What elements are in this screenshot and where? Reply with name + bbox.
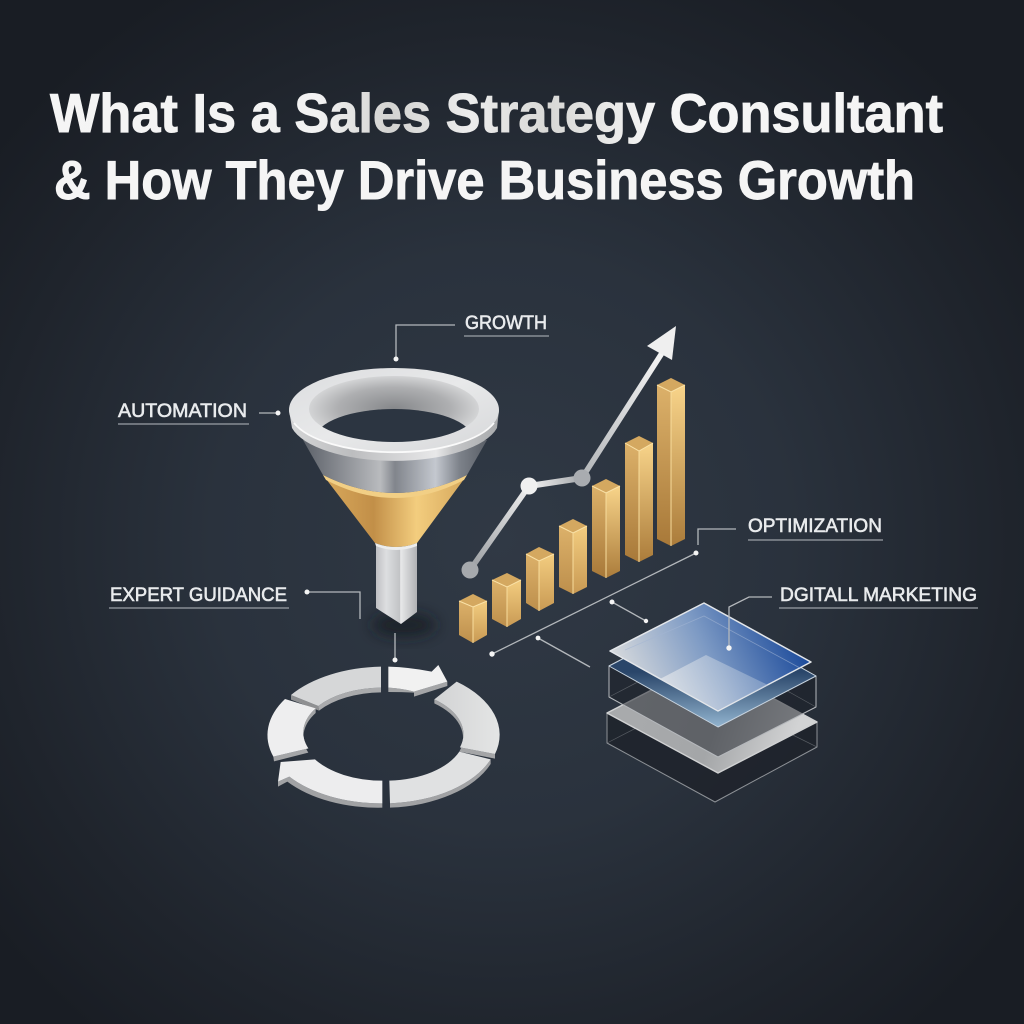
- bar 4: [559, 519, 587, 594]
- cycle ring: [267, 665, 500, 808]
- blue plane: [609, 615, 816, 727]
- upper box: [609, 615, 816, 757]
- label: automation: AUTOMATION: [118, 400, 247, 422]
- ring arrow top right: [388, 665, 447, 697]
- bar 6: [625, 436, 653, 562]
- funnel cavity: [309, 376, 479, 442]
- title: & How They Drive Business Growth: [54, 149, 915, 211]
- funnel rim side: [289, 410, 499, 461]
- funnel opening: [322, 409, 466, 442]
- funnel rim highlight: [294, 423, 494, 452]
- funnel spout collar: [375, 543, 417, 550]
- upper box back edges: [609, 646, 816, 707]
- bar 3: [526, 547, 554, 611]
- funnel: [289, 368, 499, 637]
- bar 1: [459, 594, 487, 643]
- top plane: [610, 603, 811, 711]
- layer callout: [726, 597, 772, 651]
- ring arrow bottom left: [278, 759, 382, 808]
- top plane inner diamond: [660, 655, 768, 710]
- top plane inner line: [625, 616, 800, 668]
- funnel gold highlight band: [323, 475, 467, 498]
- funnel grey band: [303, 440, 487, 493]
- stacked layers icon: [607, 597, 817, 802]
- lower box: [607, 662, 817, 802]
- connector lines: [259, 325, 736, 667]
- label: optimization: OPTIMIZATION: [748, 515, 882, 537]
- ring segment left: [267, 699, 316, 761]
- label: digital marketing: DGITALL MARKETING: [780, 584, 977, 606]
- label: growth: GROWTH: [465, 312, 547, 334]
- grey plane: [607, 662, 817, 773]
- ring segment right: [434, 682, 500, 759]
- funnel shadow: [372, 613, 436, 637]
- bar chart: [459, 378, 685, 643]
- bar 5: [592, 479, 620, 578]
- ring segment top left: [291, 667, 381, 711]
- growth trend arrow: [462, 326, 676, 578]
- funnel rim top: [289, 368, 499, 452]
- title: [50, 82, 943, 211]
- title: What Is a Sales Strategy Consultant: [50, 82, 943, 144]
- funnel spout: [376, 545, 417, 624]
- ring segment bottom right: [389, 752, 491, 808]
- bar 2: [492, 573, 521, 627]
- funnel gold cone: [323, 475, 467, 547]
- lower box back edges: [607, 692, 817, 747]
- label: expert guidance: EXPERT GUIDANCE: [110, 584, 287, 606]
- bar 7: [657, 378, 685, 546]
